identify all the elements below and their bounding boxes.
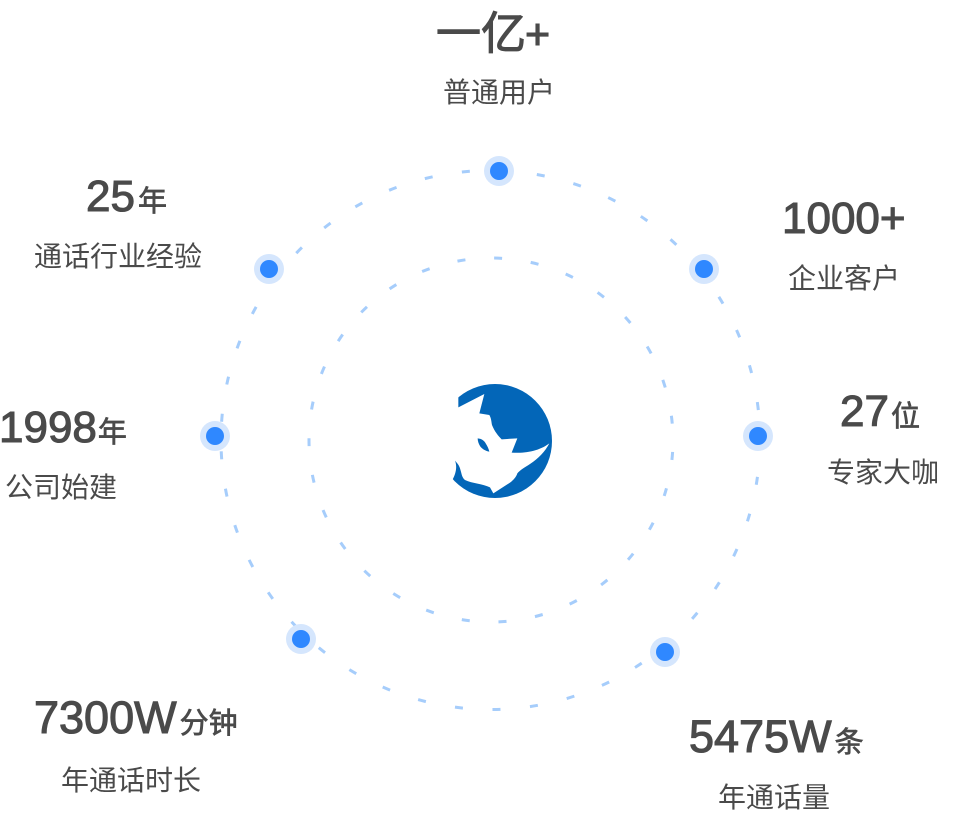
dot: left [200, 421, 230, 451]
stat: regular users: 普通用户 [443, 77, 555, 108]
dot: upper right [689, 254, 719, 284]
stat: messages: 5475W条 [689, 711, 864, 762]
stat: experts [827, 387, 939, 488]
stat: enterprise customers [782, 194, 906, 294]
stat: messages [689, 711, 864, 813]
stat: experts: 专家大咖 [827, 457, 939, 488]
stat: enterprise customers: 1000+ [782, 194, 906, 243]
stat: enterprise customers: 企业客户 [788, 263, 900, 294]
dot: top [484, 156, 514, 186]
stat: experience [34, 172, 202, 272]
stat: founded [0, 403, 127, 503]
stat: call minutes: 7300W分钟 [34, 692, 238, 743]
stat: experts: 27位 [840, 387, 920, 436]
dot: lower left [286, 624, 316, 654]
stat: call minutes: 年通话时长 [61, 765, 201, 796]
dot: upper left [254, 254, 284, 284]
stat: call minutes [34, 692, 238, 796]
stat: founded: 1998年 [0, 403, 127, 452]
inner dashed ring [309, 258, 673, 622]
stat: experience: 通话行业经验 [34, 241, 202, 272]
dot: lower right [650, 637, 680, 667]
stat: regular users [436, 8, 555, 108]
stat: messages: 年通话量 [718, 782, 830, 813]
dot: right [743, 421, 773, 451]
stat: regular users: 一亿+ [436, 8, 550, 59]
stat: founded: 公司始建 [5, 472, 117, 503]
outer dashed ring [221, 170, 760, 710]
icon: rhino logo [430, 370, 552, 498]
stat: experience: 25年 [86, 172, 167, 221]
